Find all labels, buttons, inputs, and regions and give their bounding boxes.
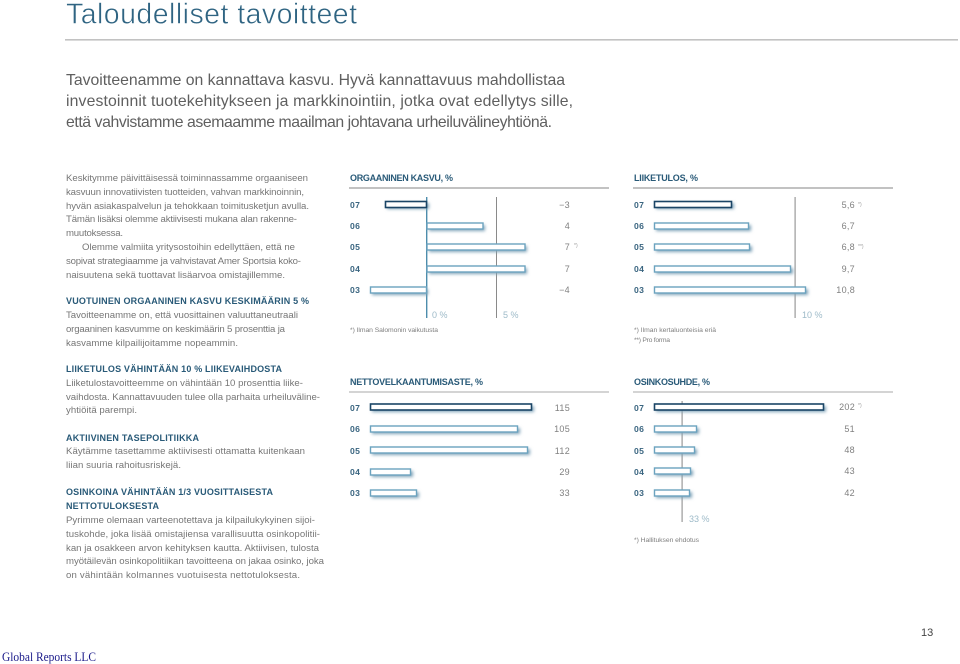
text block: intro: muutoksessa. bbox=[66, 228, 123, 239]
heading: NETTOTULOKSESTA bbox=[66, 501, 160, 511]
values: 202 bbox=[839, 402, 855, 412]
text block: intro: Olemme valmiita yritysostoihin edellyttäen, että ne bbox=[82, 242, 295, 253]
values: 4 bbox=[565, 221, 570, 231]
values bbox=[836, 200, 864, 295]
year labels bbox=[350, 403, 360, 498]
values: *) bbox=[574, 243, 578, 249]
text block: dividend policy: on vähintään kolmannes vuotuisesta nettotuloksesta. bbox=[66, 570, 300, 581]
bar 03 bbox=[370, 490, 419, 498]
bar 07 bbox=[386, 202, 429, 209]
values: 115 bbox=[555, 403, 570, 413]
values: −3 bbox=[559, 200, 570, 210]
text block: organic growth target bbox=[66, 296, 309, 349]
values: *) bbox=[858, 403, 862, 409]
panel: net gearing chart bbox=[349, 377, 609, 498]
text block: intro: naisuutena sekä tuottavat lisäarvoa omistajillemme. bbox=[66, 270, 285, 281]
text block: dividend policy bbox=[66, 487, 325, 581]
bar 06 bbox=[370, 426, 520, 434]
text block: intro: kasvuun innovatiivisten tuotteiden, vahvan markkinoinnin, bbox=[66, 187, 304, 198]
text block: organic growth target: orgaaninen kasvumme on keskimäärin 5 prosenttia ja bbox=[66, 324, 286, 335]
text block: intro: sopivat strategiaamme ja vahvistavat Amer Sportsia koko- bbox=[66, 256, 301, 267]
text block: intro: Tämän lisäksi olemme aktiivisesti mukana alan rakenne- bbox=[66, 214, 297, 225]
text block: dividend policy: tuskohde, joka lisää omistajiensa varallisuutta osinkopolitii- bbox=[66, 529, 320, 540]
values: 6,8 bbox=[842, 242, 855, 252]
year labels: 04 bbox=[634, 264, 644, 274]
axis labels bbox=[432, 310, 519, 320]
lead paragraph: että vahvistamme asemaamme maailman johtavana urheiluvälineyhtiönä. bbox=[66, 114, 552, 131]
bar 07 bbox=[654, 404, 826, 412]
year labels: 06 bbox=[350, 221, 360, 231]
axis line bbox=[794, 197, 796, 318]
bar 04 bbox=[427, 266, 527, 274]
year labels: 05 bbox=[634, 242, 644, 252]
bar 03 bbox=[370, 287, 428, 295]
text block: balance sheet policy: liian suuria rahoitusriskejä. bbox=[66, 460, 181, 471]
values: 33 bbox=[559, 488, 570, 498]
text block: dividend policy: myötäilevän osinkopolitiikan tavoitteena on jakaa osinko, joka bbox=[66, 556, 325, 567]
text block: operating result target: Liiketulostavoitteemme on vähintään 10 prosenttia liike- bbox=[66, 378, 303, 389]
footnotes bbox=[634, 327, 716, 344]
year labels bbox=[634, 200, 644, 295]
axis label: 33 % bbox=[689, 514, 710, 524]
heading: OSINKOINA VÄHINTÄÄN 1/3 VUOSITTAISESTA bbox=[66, 487, 274, 497]
values bbox=[554, 403, 570, 498]
lead paragraph: Tavoitteenamme on kannattava kasvu. Hyvä kannattavuus mahdollistaa bbox=[66, 72, 565, 89]
text block: dividend policy: kan ja osakkeen arvon kehityksen kautta. Aktiivisen, tulosta bbox=[66, 543, 320, 554]
text block: balance sheet policy bbox=[66, 433, 305, 471]
year labels: 07 bbox=[350, 200, 360, 210]
chart heading: ORGAANINEN KASVU, % bbox=[350, 173, 453, 183]
year labels bbox=[350, 200, 360, 295]
values: 7 bbox=[565, 264, 570, 274]
values: **) bbox=[858, 244, 864, 250]
heading: VUOTUINEN ORGAANINEN KASVU KESKIMÄÄRIN 5 % bbox=[66, 296, 309, 306]
values: 10,8 bbox=[836, 285, 855, 295]
chart heading: LIIKETULOS, % bbox=[634, 173, 698, 183]
year labels: 05 bbox=[634, 446, 644, 456]
bar 05 bbox=[654, 244, 752, 252]
year labels: 03 bbox=[350, 488, 360, 498]
year labels bbox=[634, 403, 644, 498]
year labels: 04 bbox=[634, 467, 644, 477]
axis labels: 5 % bbox=[503, 310, 519, 320]
year labels: 07 bbox=[634, 200, 644, 210]
values: 112 bbox=[555, 446, 570, 456]
chart heading: NETTOVELKAANTUMISASTE, % bbox=[350, 377, 483, 387]
year labels: 06 bbox=[350, 424, 360, 434]
bar 05 bbox=[654, 447, 697, 455]
year labels: 05 bbox=[350, 242, 360, 252]
bar 06 bbox=[654, 223, 751, 231]
text block: dividend policy: Pyrimme olemaan varteenotettava ja kilpailukykyinen sijoi- bbox=[66, 515, 315, 526]
axis label: 10 % bbox=[802, 310, 823, 320]
year labels: 03 bbox=[350, 285, 360, 295]
year labels: 04 bbox=[350, 264, 360, 274]
lead paragraph: investoinnit tuotekehitykseen ja markkinointiin, jotka ovat edellytys sille, bbox=[66, 93, 573, 110]
heading: AKTIIVINEN TASEPOLITIIKKA bbox=[66, 433, 200, 443]
values bbox=[839, 402, 862, 498]
values: 51 bbox=[844, 424, 855, 434]
text block: balance sheet policy: Käytämme tasettamme aktiivisesti ottamatta kuitenkaan bbox=[66, 446, 305, 457]
bar 05 bbox=[370, 447, 530, 455]
panel: organic growth chart bbox=[349, 173, 609, 334]
footnote: *) Ilman Salomonin vaikutusta bbox=[350, 327, 438, 334]
bar 07 bbox=[370, 404, 534, 412]
panel: operating result chart bbox=[633, 173, 893, 344]
footnotes: *) Ilman kertaluonteisia eriä bbox=[634, 327, 716, 334]
values: 29 bbox=[559, 467, 570, 477]
values: 105 bbox=[554, 424, 570, 434]
year labels: 07 bbox=[634, 403, 644, 413]
text block: organic growth target: Tavoitteenamme on, että vuosittainen valuuttaneutraali bbox=[66, 310, 298, 321]
values: 43 bbox=[844, 466, 855, 476]
text block: operating result target: vaihdosta. Kannattavuuden tulee olla parhaita urheiluväline- bbox=[66, 392, 320, 403]
bar 04 bbox=[654, 266, 793, 274]
axis line bbox=[682, 401, 683, 522]
bar 04 bbox=[370, 469, 413, 477]
year labels: 05 bbox=[350, 446, 360, 456]
axis labels: 0 % bbox=[432, 310, 448, 320]
lead paragraph bbox=[66, 72, 573, 131]
chart heading: OSINKOSUHDE, % bbox=[634, 377, 710, 387]
text block: organic growth target: kasvamme kilpailijoitamme nopeammin. bbox=[66, 338, 238, 349]
year labels: 07 bbox=[350, 403, 360, 413]
values: 48 bbox=[844, 445, 855, 455]
heading: LIIKETULOS VÄHINTÄÄN 10 % LIIKEVAIHDOSTA bbox=[66, 364, 282, 374]
values: *) bbox=[858, 202, 862, 208]
axis lines bbox=[426, 197, 497, 318]
values: 6,7 bbox=[842, 221, 855, 231]
values: −4 bbox=[559, 285, 570, 295]
text block: operating result target: yhtiöitä parempi. bbox=[66, 405, 137, 416]
bar 06 bbox=[427, 223, 485, 231]
year labels: 06 bbox=[634, 221, 644, 231]
text block: intro bbox=[66, 173, 309, 281]
year labels: 03 bbox=[634, 285, 644, 295]
panel: dividend ratio chart bbox=[633, 377, 893, 544]
values bbox=[559, 200, 578, 295]
bar 03 bbox=[654, 490, 692, 498]
values: 42 bbox=[844, 488, 855, 498]
text block: intro: hyvän asiakaspalvelun ja tehokkaan toimitusketjun avulla. bbox=[66, 201, 309, 212]
values: 7 bbox=[565, 242, 570, 252]
bar 07 bbox=[654, 202, 734, 209]
text block: operating result target bbox=[66, 364, 320, 416]
page number: 13 bbox=[921, 627, 933, 639]
bar 03 bbox=[654, 287, 808, 295]
bar 04 bbox=[654, 468, 693, 476]
text block: intro: Keskitymme päivittäisessä toiminnassamme orgaaniseen bbox=[66, 173, 308, 184]
bar 06 bbox=[654, 426, 699, 434]
values: 5,6 bbox=[842, 200, 855, 210]
footnotes: **) Pro forma bbox=[634, 337, 670, 344]
year labels: 06 bbox=[634, 424, 644, 434]
heading bbox=[66, 487, 274, 511]
year labels: 04 bbox=[350, 467, 360, 477]
footer: publisher: Global Reports LLC bbox=[2, 649, 96, 664]
year labels: 03 bbox=[634, 488, 644, 498]
footnote: *) Hallituksen ehdotus bbox=[634, 537, 700, 544]
bar 05 bbox=[427, 244, 527, 252]
values: 9,7 bbox=[842, 264, 855, 274]
